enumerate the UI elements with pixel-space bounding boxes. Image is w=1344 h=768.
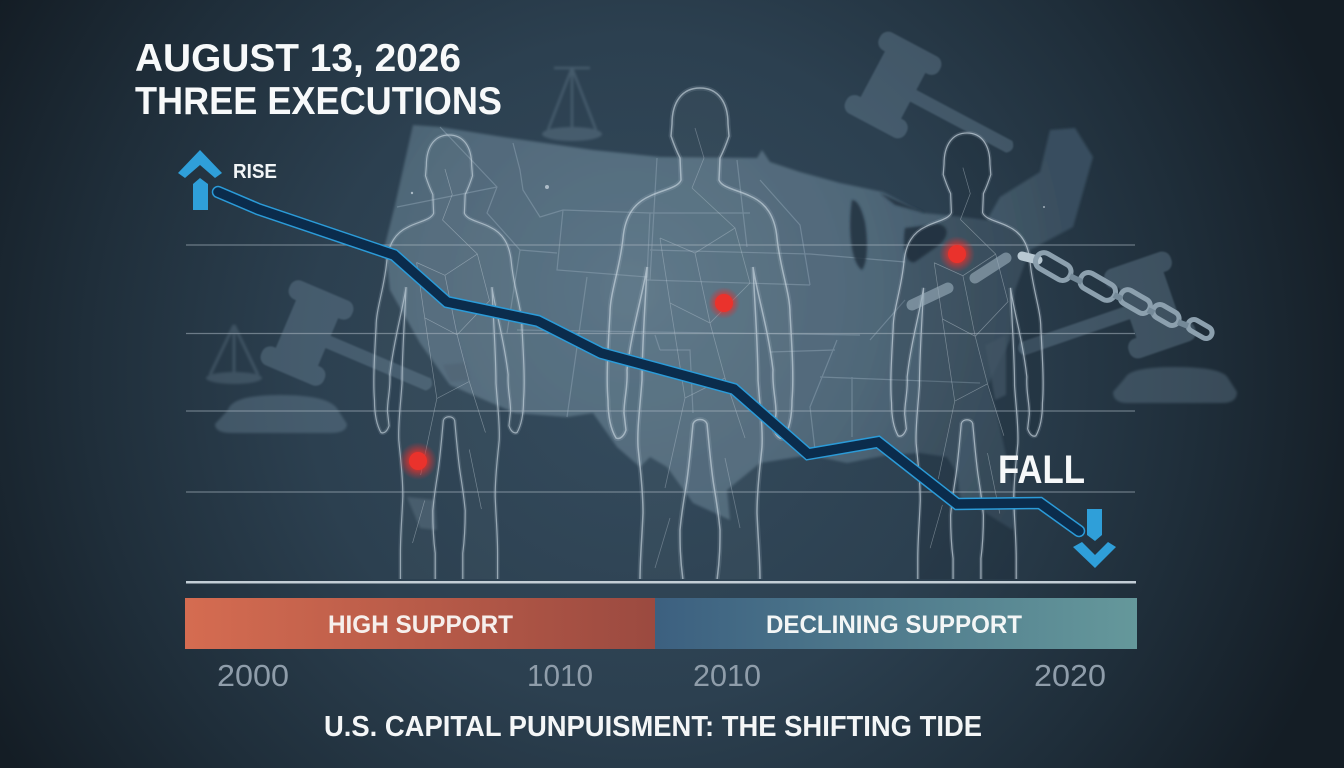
year labels: 2010 [693,658,761,693]
rise label: RISE [233,160,277,183]
gavel: left [258,277,450,428]
year labels: 2020 [1034,658,1106,693]
person silhouette: center [607,88,793,628]
year labels: 1010 [527,658,593,693]
scales of justice: left [206,325,262,384]
grid lines [186,245,1135,492]
red marker: right figure [939,236,975,272]
title [135,37,502,123]
gavel: right [1003,249,1198,395]
footer title: U.S. CAPITAL PUNPUISMENT: THE SHIFTING TIDE [324,711,982,743]
gavel base: left [215,395,347,433]
person silhouette: left [374,135,524,594]
support bar: declining support: DECLINING SUPPORT [766,611,1022,639]
fall label: FALL [998,448,1085,492]
person silhouette: right [891,133,1043,600]
red marker: center figure [708,287,740,319]
support bar: declining support [655,598,1137,649]
broken chain [912,250,1214,341]
map of the United States [385,125,1093,530]
trend line: falling support [218,192,1079,531]
support bar: high support [185,598,655,649]
icon: fall arrow [1073,509,1116,568]
title: AUGUST 13, 2026 [135,37,461,80]
scales of justice: top [542,68,602,141]
gavel: top right [841,29,1034,189]
timeline baseline [186,581,1136,584]
year labels: 2000 [217,658,289,693]
title: THREE EXECUTIONS [135,80,502,123]
support bar: high support: HIGH SUPPORT [328,611,513,639]
gavel base: right [1113,367,1237,403]
red marker: left figure [399,442,437,480]
year labels [217,658,1106,693]
icon: rise arrow [178,150,222,210]
